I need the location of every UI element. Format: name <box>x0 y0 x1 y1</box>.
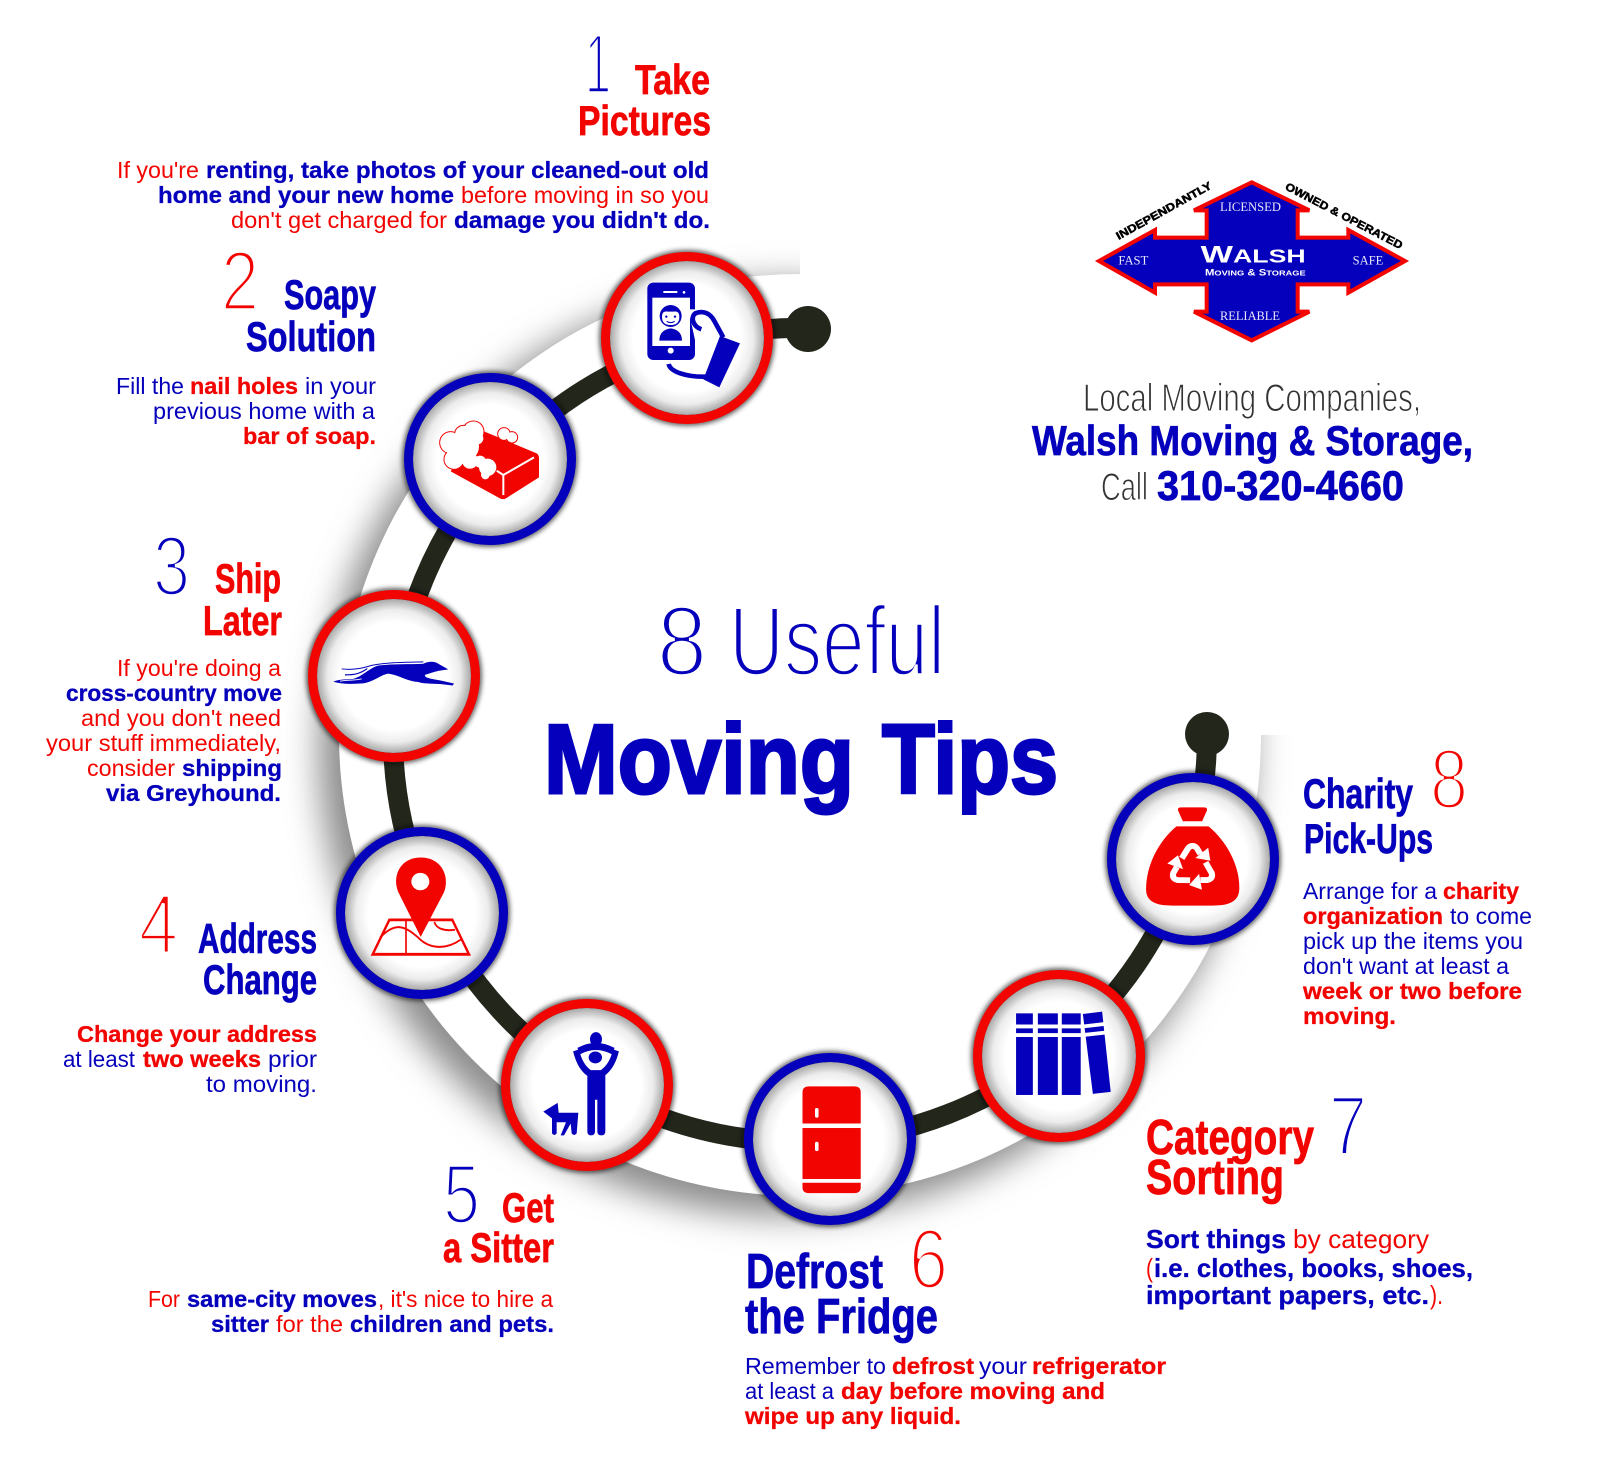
tip 2 text: nail holes <box>190 373 298 399</box>
tip 6 text: 6 <box>909 1212 948 1306</box>
tip 5 text: Get <box>502 1184 554 1231</box>
step 5 circle: get a sitter <box>500 998 674 1172</box>
tip 7 text: important papers, etc. <box>1146 1280 1429 1310</box>
tip 3 text: consider <box>87 755 175 781</box>
tip 1 text: If you're <box>117 157 199 183</box>
company logo: OWNED & OPERATED <box>1283 181 1404 252</box>
tip 3 text: your stuff immediately, <box>46 730 281 756</box>
tip 3 text: If you're doing a <box>117 655 281 681</box>
tip 7 text: ( <box>1146 1253 1153 1283</box>
company logo: INDEPENDANTLY <box>1114 180 1215 243</box>
tip 6 text: refrigerator <box>1032 1353 1166 1379</box>
icon: greyhound <box>333 662 454 686</box>
tip 1 text: 1 <box>585 17 611 111</box>
tip 7 text: ). <box>1430 1280 1443 1310</box>
tip 6 text: your <box>979 1353 1027 1379</box>
tip 6 text: at least a <box>745 1378 834 1404</box>
tip 1 text: home and your new home <box>158 182 454 208</box>
tip 7 text: Sort things <box>1146 1224 1286 1254</box>
step 6 circle: defrost the fridge <box>743 1052 917 1226</box>
tip 6 text <box>744 1212 1166 1429</box>
tip 6 text: Defrost <box>746 1245 883 1299</box>
tip 1 text: before moving in so you <box>461 182 709 208</box>
tip 4 text: prior <box>268 1046 317 1072</box>
tip 6 text: day before moving and <box>841 1378 1105 1404</box>
company call to action: Walsh Moving & Storage, <box>1032 417 1473 464</box>
icon: parent, child and dog <box>543 1032 616 1135</box>
step 2 circle: soapy solution <box>403 372 577 546</box>
tip 3 text: via Greyhound. <box>106 780 281 806</box>
tip 8 text: 8 <box>1430 732 1468 826</box>
tip 7 text: Sorting <box>1146 1151 1284 1205</box>
company logo: RELIABLE <box>1220 309 1280 323</box>
tip 6 text: defrost <box>892 1353 974 1379</box>
tip 4 text: Address <box>198 915 317 962</box>
tip 5 text: for the <box>276 1311 343 1337</box>
tip 2 text: Fill the <box>116 373 184 399</box>
company logo <box>1099 180 1405 340</box>
tip 6 text: the Fridge <box>745 1290 938 1344</box>
tip 4 text: two weeks <box>143 1046 261 1072</box>
tip 5 text: children and pets. <box>350 1311 554 1337</box>
tip 1 text <box>117 17 711 233</box>
tip 7 text: 7 <box>1329 1079 1367 1173</box>
tip 8 text: organization <box>1303 903 1443 929</box>
tip 4 text: Change <box>203 956 317 1003</box>
tip 8 text: pick up the items you <box>1303 928 1523 954</box>
tip 8 text: to come <box>1450 903 1532 929</box>
tip 1 text: don't get charged for <box>231 207 447 233</box>
tip 5 text: a Sitter <box>443 1224 554 1271</box>
tip 5 text: , it's nice to hire a <box>378 1286 553 1312</box>
tip 8 text: Charity <box>1303 770 1413 817</box>
icon: soap bar <box>440 421 539 499</box>
step 1 circle: take pictures <box>600 251 774 425</box>
tip 3 text: 3 <box>153 519 190 613</box>
tip 8 text: don't want at least a <box>1303 953 1509 979</box>
icon: books <box>1014 1012 1111 1095</box>
tip 7 text <box>1146 1079 1473 1310</box>
timeline arc <box>393 306 1229 1142</box>
tip 8 text: moving. <box>1303 1003 1396 1029</box>
tip 2 text: in your <box>305 373 376 399</box>
main title: Useful <box>729 586 945 696</box>
tip 3 text: Ship <box>215 555 281 602</box>
tip 1 text: Pictures <box>578 97 711 144</box>
tip 8 text: week or two before <box>1302 978 1522 1004</box>
main title: Tips <box>882 704 1058 814</box>
icon: phone selfie <box>647 283 740 387</box>
tip 8 text: charity <box>1443 878 1519 904</box>
tip 5 text: 5 <box>443 1147 480 1241</box>
tip 3 text: Later <box>203 597 282 644</box>
tip 8 text: Arrange for a <box>1303 878 1437 904</box>
tip 2 text: bar of soap. <box>243 423 376 449</box>
company logo: LICENSED <box>1220 200 1281 214</box>
tip 3 text: shipping <box>182 755 282 781</box>
tip 5 text: For <box>148 1286 180 1312</box>
tip 2 text: Solution <box>246 313 376 360</box>
tip 2 text: 2 <box>221 234 259 328</box>
tip 2 text <box>116 234 376 449</box>
disc shadow band <box>319 274 1261 1216</box>
tip 6 text: wipe up any liquid. <box>744 1403 961 1429</box>
tip 1 text: damage you didn't do. <box>454 207 710 233</box>
tip 2 text: Soapy <box>284 271 376 318</box>
tip 8 text <box>1302 732 1532 1029</box>
company logo: WALSH <box>1201 241 1306 268</box>
company call to action: Local Moving Companies, <box>1083 377 1421 420</box>
tip 5 text: sitter <box>211 1311 269 1337</box>
tip 4 text: 4 <box>139 877 178 971</box>
tip 3 text <box>46 519 282 806</box>
tip 1 text: renting, take photos of your cleaned-out old <box>206 157 709 183</box>
tip 5 text: same-city moves <box>187 1286 377 1312</box>
step 7 circle: category sorting <box>972 969 1146 1143</box>
tip 4 text: at least <box>63 1046 136 1072</box>
company call to action: Call <box>1101 466 1148 509</box>
main title: 8 <box>657 586 707 696</box>
company call to action: 310-320-4660 <box>1157 462 1404 509</box>
main title: Moving <box>544 704 854 814</box>
tip 4 text: to moving. <box>206 1071 317 1097</box>
step 4 circle: address change <box>335 826 509 1000</box>
tip 7 text: by category <box>1293 1224 1429 1254</box>
icon: recycling bag <box>1146 807 1239 906</box>
tip 3 text: and you don't need <box>81 705 281 731</box>
tip 6 text: Remember to <box>745 1353 886 1379</box>
tip 4 text: Change your address <box>77 1021 317 1047</box>
company logo: MOVING & STORAGE <box>1205 267 1306 277</box>
tip 7 text: Category <box>1146 1111 1314 1165</box>
tip 5 text <box>148 1147 554 1337</box>
step 8 circle: charity pick-ups <box>1106 772 1280 946</box>
main title <box>544 586 1058 814</box>
tip 7 text: i.e. clothes, books, shoes, <box>1154 1253 1473 1283</box>
icon: map pin <box>373 857 469 954</box>
company logo: FAST <box>1118 253 1149 267</box>
step 3 circle: ship later <box>307 589 481 763</box>
tip 4 text <box>63 877 317 1097</box>
tip 3 text: cross-country move <box>66 680 282 706</box>
tip 2 text: previous home with a <box>153 398 375 424</box>
company call to action <box>1032 377 1473 509</box>
icon: fridge <box>802 1086 861 1193</box>
company logo: SAFE <box>1353 253 1384 267</box>
tip 1 text: Take <box>635 56 710 103</box>
tip 8 text: Pick-Ups <box>1304 815 1433 862</box>
